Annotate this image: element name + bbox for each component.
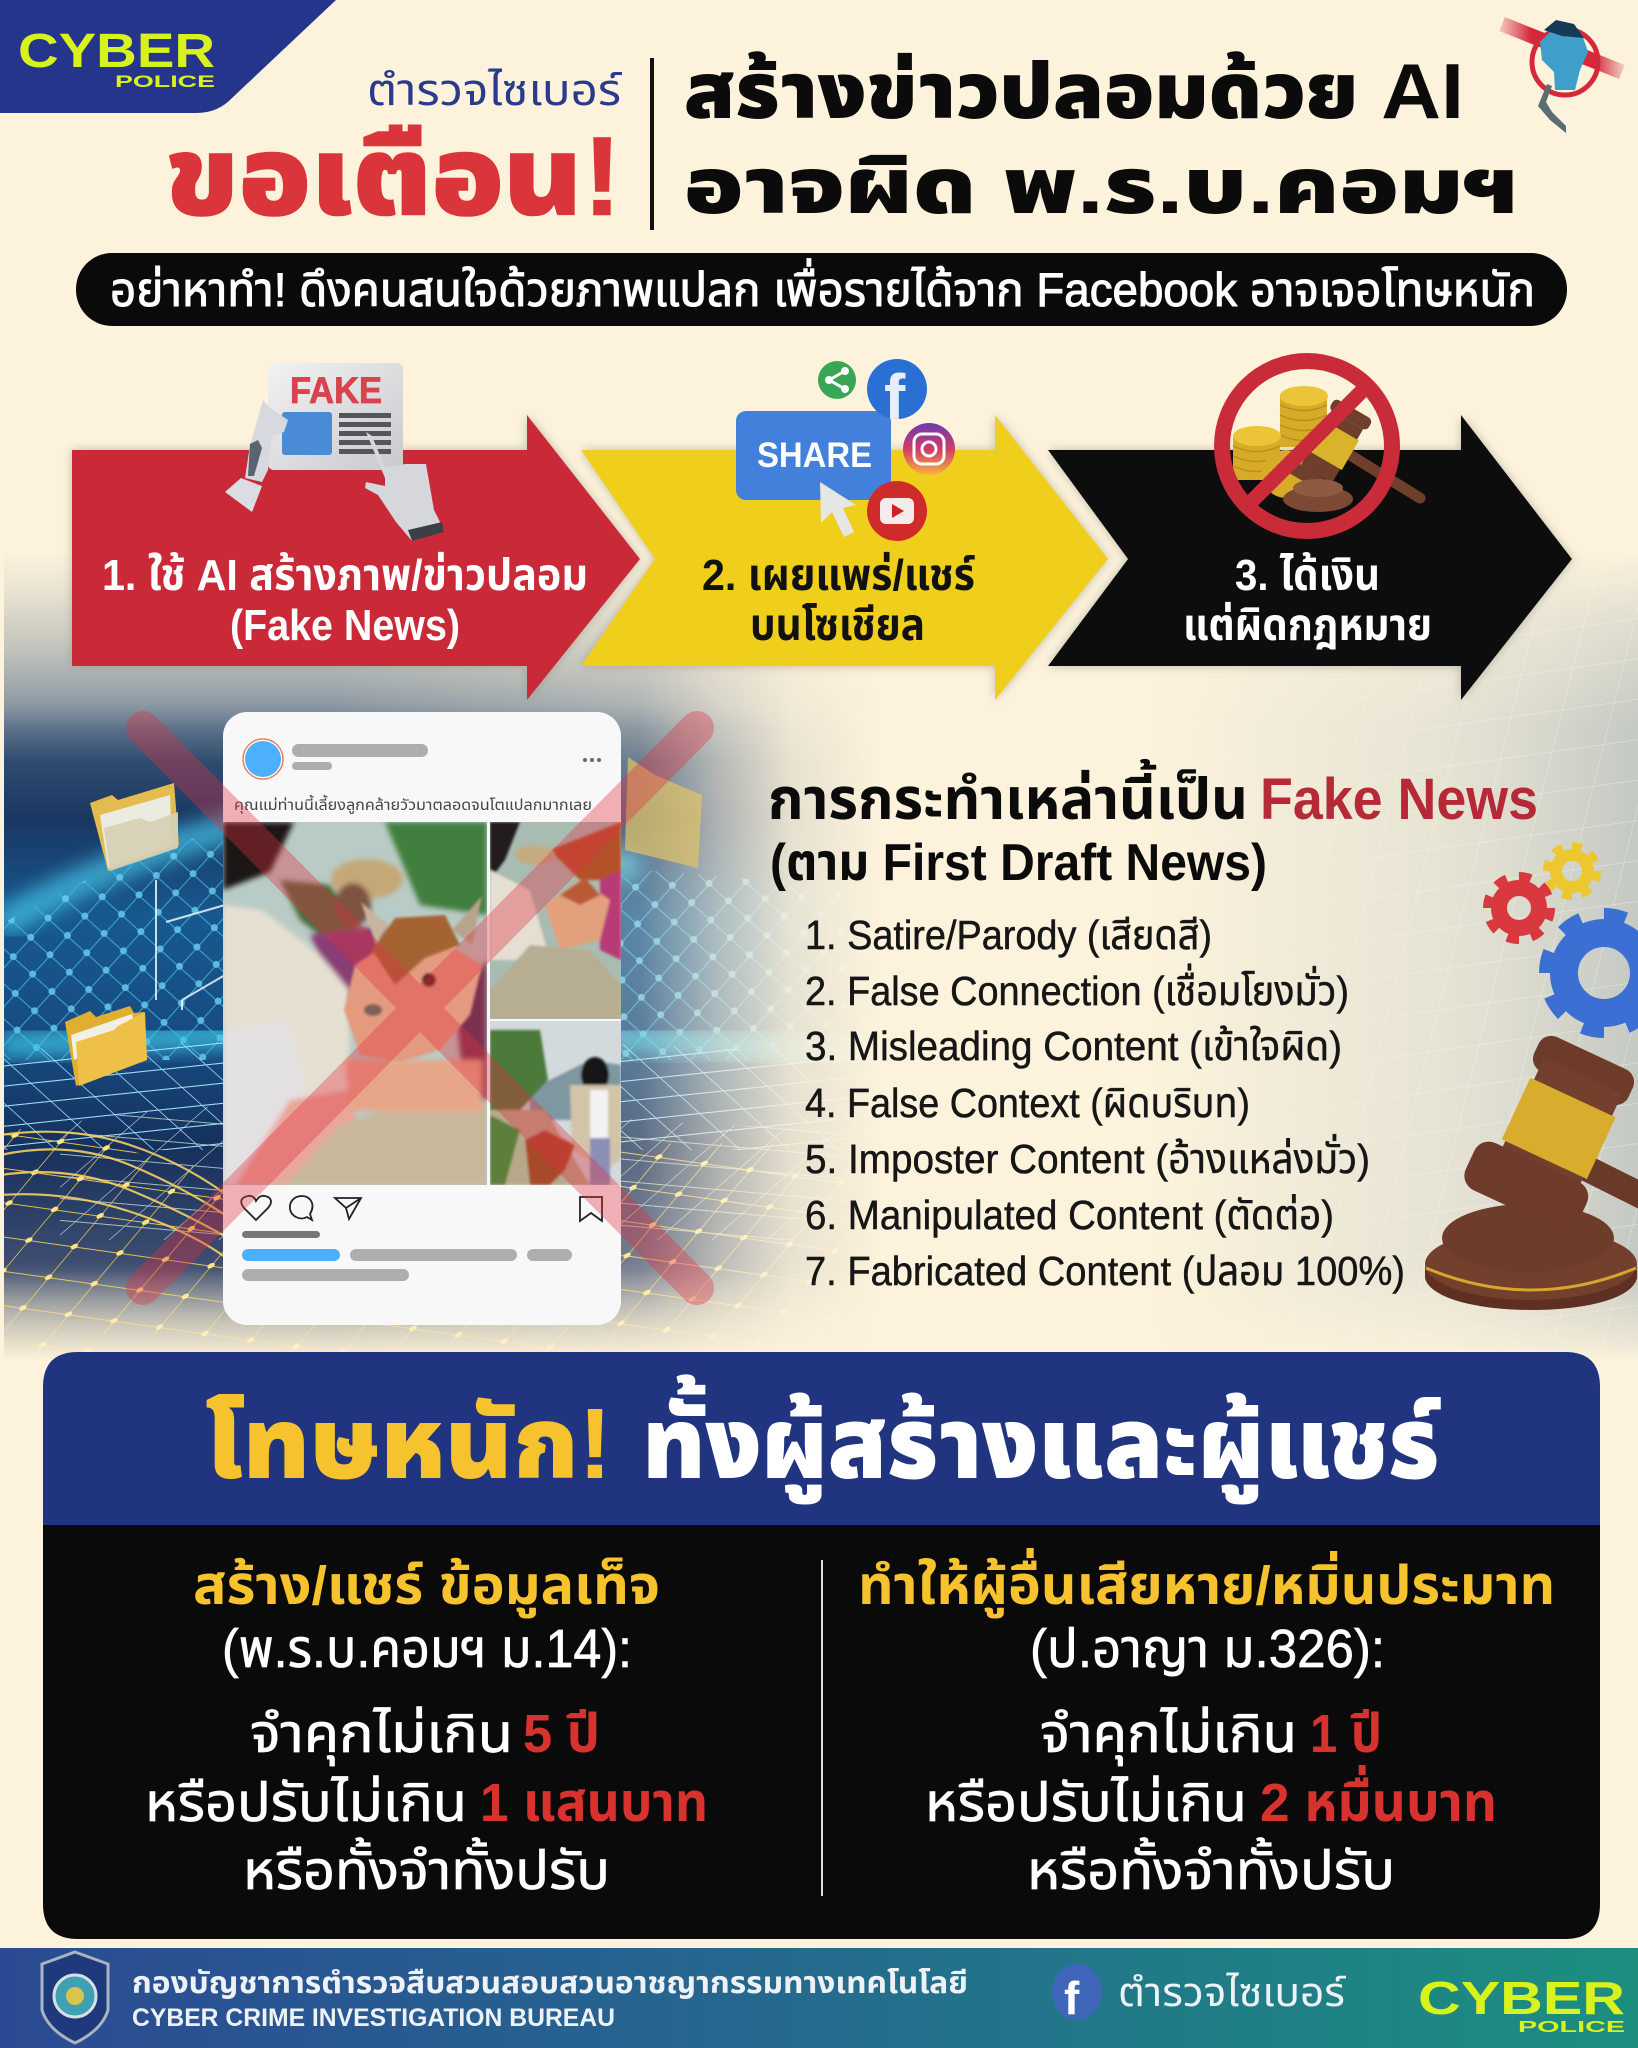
right jail: จำคุกไม่เกิน	[1040, 1704, 1297, 1766]
footer org english: CYBER CRIME INVESTIGATION BUREAU	[132, 2004, 615, 2032]
list of fake news types	[805, 912, 1405, 1294]
folder icons	[65, 757, 702, 1086]
step 2 line 2: บนโซเชียล	[750, 601, 925, 650]
item 1: 1. Satire/Parody (เสียดสี)	[805, 912, 1212, 958]
panel heading yellow: โทษหนัก!	[205, 1388, 612, 1500]
item 4: 4. False Context (ผิดบริบท)	[805, 1080, 1250, 1126]
icon: no money gavel	[1222, 361, 1420, 531]
icon: blue gear	[1546, 915, 1638, 1031]
step arrow 1	[72, 415, 640, 700]
coin stack right	[1280, 386, 1328, 447]
side photo bottom	[490, 1021, 621, 1185]
emblem: fist prohibition, top right	[1502, 20, 1622, 133]
heading line 2: (ตาม First Draft News)	[770, 834, 1267, 892]
item 5: 5. Imposter Content (อ้างแหล่งมั่ว)	[805, 1133, 1370, 1182]
panel heading white: ทั้งผู้สร้างและผู้แชร์	[642, 1374, 1441, 1504]
fake news heading	[768, 758, 1538, 892]
step arrow 2	[581, 415, 1108, 700]
post caption: คุณแม่ท่านนี้เลี้ยงลูกคล้ายวัวมาตลอดจนโตแปลกมากเลย	[234, 794, 592, 814]
step 1 line 1: 1. ใช้ AI สร้างภาพ/ข่าวปลอม	[102, 551, 588, 600]
footer logo: police: POLICE	[1518, 2019, 1626, 2036]
icon: gears	[1488, 846, 1638, 1031]
heading part: thai: การกระทำเหล่านี้เป็น	[768, 758, 1248, 832]
left column	[145, 1556, 708, 1901]
cream fade at bottom of mesh	[0, 1270, 1638, 1380]
left both: หรือทั้งจำทั้งปรับ	[243, 1837, 610, 1901]
step 1 line 2: (Fake News)	[230, 601, 460, 650]
icon: share button with social icons: SHARE	[757, 436, 872, 475]
side photo top	[490, 822, 621, 1019]
column divider	[821, 1560, 823, 1896]
item 2: 2. False Connection (เชื่อมโยงมั่ว)	[805, 963, 1349, 1014]
header banner: cyber police	[0, 0, 336, 113]
right column	[858, 1548, 1555, 1901]
username placeholders	[292, 744, 428, 770]
logo text: police: POLICE	[115, 72, 215, 91]
icon: fake newspaper with robot hands: FAKE	[290, 370, 382, 411]
main title	[684, 47, 1518, 230]
caption placeholders	[242, 1249, 572, 1281]
heading part: fake news: Fake News	[1260, 767, 1538, 832]
left title: สร้าง/แชร์ ข้อมูลเท็จ	[193, 1556, 660, 1618]
more dots	[583, 758, 601, 762]
icon: yellow gear	[1547, 846, 1597, 896]
right title: ทำให้ผู้อื่นเสียหาย/หมิ่นประมาท	[858, 1548, 1555, 1618]
left law: (พ.ร.บ.คอมฯ ม.14):	[222, 1619, 632, 1679]
step arrow 3	[1048, 415, 1572, 700]
right both: หรือทั้งจำทั้งปรับ	[1027, 1837, 1395, 1901]
step 3 line 1: 3. ได้เงิน	[1235, 551, 1380, 600]
penalties panel	[43, 1352, 1600, 1939]
icon: folder top left	[90, 783, 179, 871]
icon: facebook	[867, 359, 927, 433]
left jail value: 5 ปี	[523, 1704, 600, 1764]
left fine value: 1 แสนบาท	[480, 1773, 708, 1833]
right law: (ป.อาญา ม.326):	[1030, 1619, 1385, 1679]
step 2 line 1: 2. เผยแพร่/แชร์	[702, 551, 975, 600]
icon: green share	[818, 361, 856, 399]
right fine: หรือปรับไม่เกิน	[925, 1773, 1247, 1833]
footer logo: cyber: CYBER	[1418, 1972, 1625, 2024]
icon: youtube	[867, 481, 927, 541]
right robot hand	[365, 432, 444, 541]
item 6: 6. Manipulated Content (ตัดต่อ)	[805, 1192, 1334, 1238]
main photo: woman holding cow-headed baby	[223, 822, 487, 1185]
social post mockup	[223, 712, 621, 1325]
faint mesh background, right	[1248, 570, 1638, 1354]
icon: comment	[290, 1196, 312, 1220]
icon: send	[335, 1198, 361, 1219]
left jail: จำคุกไม่เกิน	[250, 1704, 513, 1766]
item 7: 7. Fabricated Content (ปลอม 100%)	[805, 1248, 1405, 1294]
footer org thai: กองบัญชาการตำรวจสืบสวนสอบสวนอาชญากรรมทางเทคโนโลยี	[132, 1967, 968, 2000]
like count placeholder	[242, 1231, 320, 1238]
avatar	[243, 739, 283, 779]
icon: fake newspaper with robot hands	[225, 363, 444, 541]
right jail value: 1 ปี	[1310, 1704, 1382, 1764]
step 3 line 2: แต่ผิดกฎหมาย	[1183, 601, 1432, 650]
panel header	[43, 1352, 1600, 1525]
warning pill	[76, 253, 1567, 326]
heading: ขอเตือน!: ขอเตือน!	[165, 114, 622, 239]
icon: facebook: f	[1064, 1972, 1080, 2024]
network lines	[156, 880, 225, 1010]
icon: folder right of phone	[625, 757, 702, 868]
small gavel	[1282, 393, 1420, 512]
icon: red gear	[1488, 877, 1550, 939]
footer	[0, 1948, 1638, 2048]
icon: bookmark	[580, 1197, 602, 1221]
icon: share button with social icons	[736, 359, 955, 541]
coin stack left	[1233, 426, 1281, 480]
right fine value: 2 หมื่นบาท	[1260, 1765, 1497, 1833]
warning text: อย่าหาทำ! ดึงคนสนใจด้วยภาพแปลก เพื่อรายได้จาก Facebook อาจเจอโทษหนัก	[110, 258, 1535, 316]
tech mesh background, left	[4, 568, 848, 1358]
icon: cursor	[820, 482, 856, 537]
title line 1: สร้างข่าวปลอมด้วย AI	[684, 47, 1464, 135]
footer facebook name: ตำรวจไซเบอร์	[1118, 1971, 1346, 2015]
red cross over post	[143, 728, 697, 1288]
title line 2: อาจผิด พ.ร.บ.คอมฯ	[684, 142, 1518, 230]
brand line: ตำรวจไซเบอร์: ตำรวจไซเบอร์	[367, 66, 622, 115]
icon: big gavel	[1425, 1026, 1638, 1310]
panel body	[43, 1525, 1600, 1939]
cream fade at top of mesh	[0, 530, 1638, 730]
icon: facebook: f	[884, 361, 906, 433]
icon: heart	[241, 1196, 271, 1220]
logo text: cyber: CYBER	[18, 25, 215, 78]
left fine: หรือปรับไม่เกิน	[145, 1773, 467, 1833]
icon: police badge	[42, 1952, 108, 2043]
icon: facebook	[1052, 1964, 1102, 2024]
icon: folder lower left	[65, 1006, 147, 1086]
left robot hand	[225, 400, 288, 512]
icon: instagram	[903, 423, 955, 475]
header divider	[650, 58, 654, 230]
item 3: 3. Misleading Content (เข้าใจผิด)	[805, 1023, 1342, 1069]
